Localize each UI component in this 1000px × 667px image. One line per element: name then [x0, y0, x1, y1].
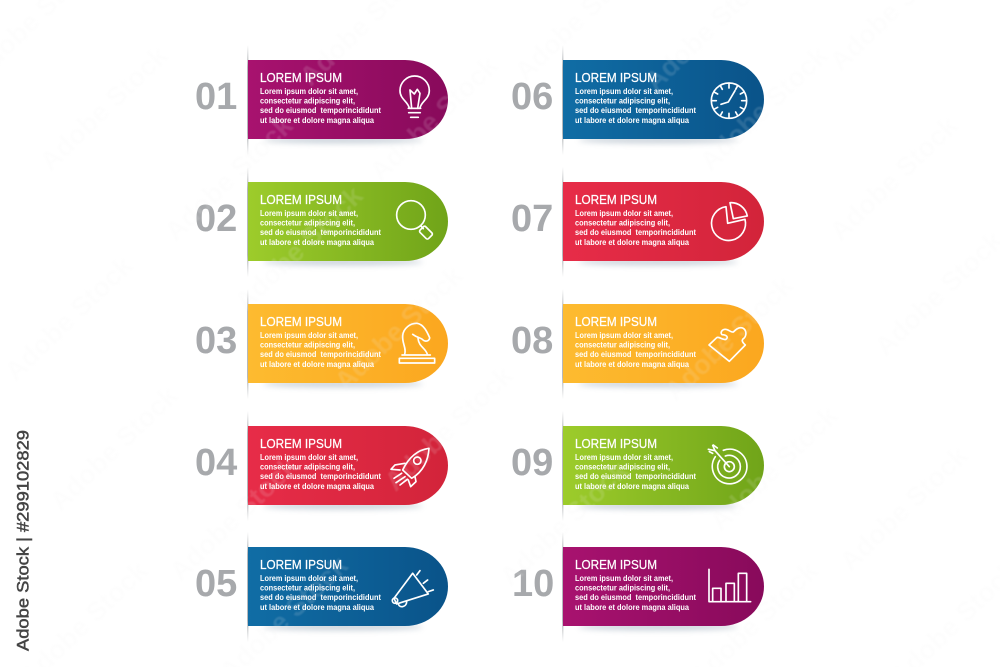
body text — [260, 86, 381, 125]
icon: light bulb — [400, 76, 429, 117]
body text: consectetur adipiscing elit, — [575, 218, 670, 228]
number 09: 09 — [511, 442, 553, 484]
body text — [575, 573, 696, 612]
body text: sed do eiusmod temporincididunt — [575, 105, 696, 115]
number 01: 01 — [195, 76, 237, 118]
body text: consectetur adipiscing elit, — [260, 218, 355, 228]
body text: ut labore et dolore magna aliqua — [575, 602, 689, 612]
body text: ut labore et dolore magna aliqua — [260, 359, 374, 369]
body text: consectetur adipiscing elit, — [260, 583, 355, 593]
panel: item 07 — [511, 167, 764, 277]
body text: Lorem ipsum dolor sit amet, — [575, 452, 673, 462]
body text: ut labore et dolore magna aliqua — [575, 115, 689, 125]
watermark pattern: Adobe Stock — [34, 40, 174, 177]
body text: sed do eiusmod temporincididunt — [260, 349, 381, 359]
body text: Lorem ipsum dolor sit amet, — [575, 86, 673, 96]
body text — [260, 452, 381, 491]
watermark pattern: Adobe Stock — [0, 250, 139, 387]
number 06: 06 — [511, 76, 553, 118]
number 02: 02 — [195, 198, 237, 240]
body text: Lorem ipsum dolor sit amet, — [575, 330, 673, 340]
panel: item 06 — [511, 45, 764, 155]
body text: sed do eiusmod temporincididunt — [575, 471, 696, 481]
body text — [260, 208, 381, 247]
heading: LOREM IPSUM — [260, 71, 342, 85]
panel: item 10 — [512, 532, 764, 642]
heading: LOREM IPSUM — [575, 193, 657, 207]
body text: Lorem ipsum dolor sit amet, — [260, 573, 358, 583]
heading: LOREM IPSUM — [575, 315, 657, 329]
body text: Lorem ipsum dolor sit amet, — [575, 208, 673, 218]
watermark pattern: Adobe Stock — [694, 40, 834, 177]
heading: LOREM IPSUM — [575, 437, 657, 451]
body text: consectetur adipiscing elit, — [575, 583, 670, 593]
body text: Lorem ipsum dolor sit amet, — [260, 330, 358, 340]
body text: sed do eiusmod temporincididunt — [575, 227, 696, 237]
number 10: 10 — [512, 563, 554, 605]
watermark pattern: Adobe Stock — [159, 110, 299, 247]
icon: target with arrow — [708, 445, 747, 484]
body text: ut labore et dolore magna aliqua — [575, 481, 689, 491]
panel: item 08 — [511, 289, 764, 399]
watermark pattern: Adobe Stock — [834, 440, 974, 577]
body text: consectetur adipiscing elit, — [575, 96, 670, 106]
body text: sed do eiusmod temporincididunt — [575, 349, 696, 359]
body text: sed do eiusmod temporincididunt — [260, 471, 381, 481]
icon: chess knight — [399, 323, 435, 363]
number 05: 05 — [195, 563, 237, 605]
heading: LOREM IPSUM — [260, 193, 342, 207]
panel: item 05 — [195, 532, 448, 642]
body text: ut labore et dolore magna aliqua — [260, 602, 374, 612]
watermark pattern: Adobe Stock — [329, 260, 469, 397]
body text: consectetur adipiscing elit, — [260, 96, 355, 106]
number 04: 04 — [195, 442, 237, 484]
watermark pattern: Adobe Stock — [364, 50, 504, 187]
icon: pie chart — [712, 203, 747, 240]
body text: consectetur adipiscing elit, — [575, 462, 670, 472]
watermark pattern: Adobe Stock — [824, 110, 964, 247]
panel: item 02 — [195, 167, 448, 277]
watermark pattern: Adobe Stock — [704, 400, 844, 537]
watermark pattern: Adobe Stock — [229, 180, 369, 317]
panel: item 04 — [195, 411, 448, 521]
body text — [575, 452, 696, 491]
body text: consectetur adipiscing elit, — [260, 340, 355, 350]
icon: megaphone — [392, 571, 433, 607]
body text — [575, 86, 696, 125]
icon: puzzle piece — [709, 328, 746, 361]
number 08: 08 — [511, 320, 553, 362]
watermark pattern: Adobe Stock — [494, 455, 634, 592]
body text: consectetur adipiscing elit, — [260, 462, 355, 472]
watermark pattern: Adobe Stock — [44, 380, 184, 517]
body text — [575, 208, 696, 247]
body text: ut labore et dolore magna aliqua — [260, 481, 374, 491]
icon: bar chart — [709, 569, 751, 602]
body text: sed do eiusmod temporincididunt — [260, 592, 381, 602]
body text: sed do eiusmod temporincididunt — [575, 592, 696, 602]
number 07: 07 — [511, 198, 553, 240]
icon: magnifying glass — [397, 201, 433, 240]
icon: clock — [711, 83, 747, 118]
body text — [260, 330, 381, 369]
watermark pattern: Adobe Stock — [164, 450, 304, 587]
body text: sed do eiusmod temporincididunt — [260, 105, 381, 115]
heading: LOREM IPSUM — [260, 315, 342, 329]
body text: sed do eiusmod temporincididunt — [260, 227, 381, 237]
heading: LOREM IPSUM — [260, 558, 342, 572]
body text: Lorem ipsum dolor sit amet, — [260, 86, 358, 96]
watermark pattern: Adobe Stock — [379, 360, 519, 497]
panel: item 03 — [195, 289, 448, 399]
heading: LOREM IPSUM — [575, 558, 657, 572]
heading: LOREM IPSUM — [260, 437, 342, 451]
icon: rocket — [391, 448, 429, 487]
body text: Lorem ipsum dolor sit amet, — [260, 452, 358, 462]
number 03: 03 — [195, 320, 237, 362]
body text: Lorem ipsum dolor sit amet, — [575, 573, 673, 583]
panel: item 09 — [511, 411, 764, 521]
body text: Lorem ipsum dolor sit amet, — [260, 208, 358, 218]
body text — [575, 330, 696, 369]
body text: consectetur adipiscing elit, — [575, 340, 670, 350]
body text — [260, 573, 381, 612]
body text: ut labore et dolore magna aliqua — [575, 359, 689, 369]
body text: ut labore et dolore magna aliqua — [575, 237, 689, 247]
stock credit: Adobe Stock | #299102829 — [14, 430, 32, 651]
body text: ut labore et dolore magna aliqua — [260, 237, 374, 247]
body text: ut labore et dolore magna aliqua — [260, 115, 374, 125]
panel: item 01 — [195, 45, 448, 155]
watermark pattern: Adobe Stock — [659, 270, 799, 407]
heading: LOREM IPSUM — [575, 71, 657, 85]
